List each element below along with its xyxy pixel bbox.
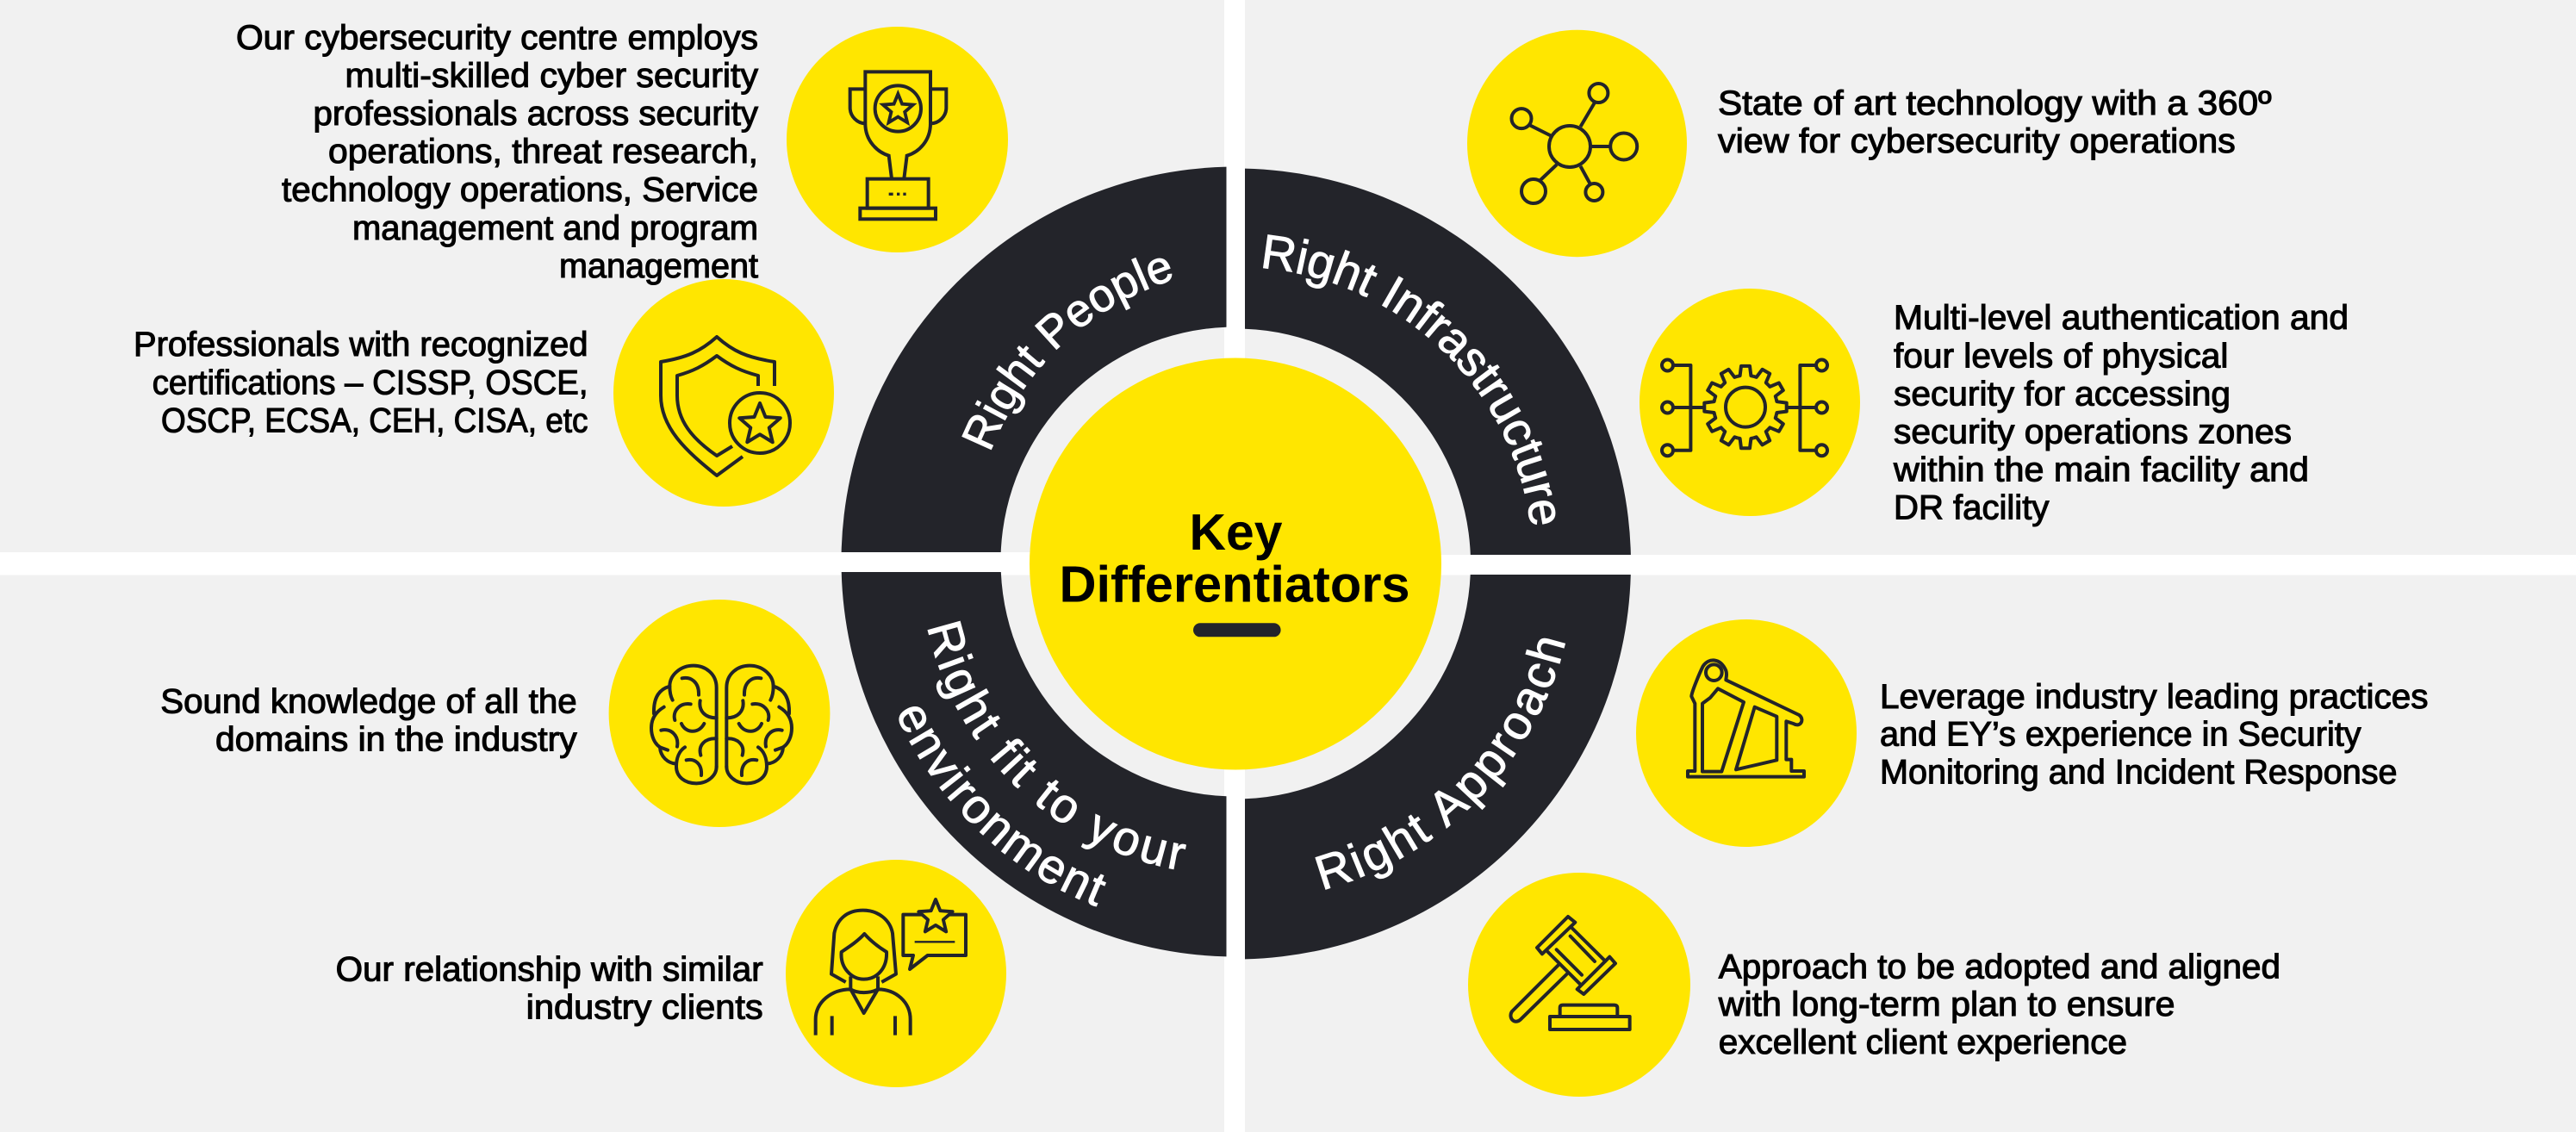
text: state of art technology: State of art technology with a 360º (1718, 84, 2272, 122)
item: state of art technology (1467, 30, 2272, 257)
icon: woman with speech bubble (786, 860, 1006, 1087)
text: state of art technology (1718, 84, 2272, 160)
text: leading practices: Leverage industry leading practices (1880, 678, 2428, 716)
text: client relationship: industry clients (526, 989, 763, 1027)
item: certifications (134, 279, 834, 507)
segment: Right People (841, 167, 1227, 552)
text: multi-skilled professionals: technology operations, Service (282, 171, 758, 208)
item: long-term approach (1468, 873, 2280, 1097)
item: domain knowledge (160, 600, 830, 827)
text: certifications: Professionals with recognized (134, 326, 588, 364)
text: multi-level authentication: within the main facility and (1893, 451, 2309, 489)
segment: Right Approach (1245, 575, 1631, 960)
segment: Right People: Right People (961, 257, 1172, 450)
text: domain knowledge: Sound knowledge of all the (160, 683, 577, 721)
text: multi-level authentication: Multi-level authentication and (1894, 299, 2349, 337)
centre circle: Key Differentiators (1030, 358, 1441, 770)
icon: network nodes (1467, 30, 1687, 257)
text: long-term approach (1718, 948, 2280, 1061)
icon: oil pump (1636, 619, 1857, 847)
text: long-term approach: Approach to be adopted and aligned (1719, 948, 2280, 986)
icon: gavel (1468, 873, 1690, 1097)
segment: Right Infrastructure (1245, 169, 1631, 555)
item: client relationship (336, 860, 1006, 1087)
centre circle: Key Differentiators: Differentiators (1060, 555, 1409, 613)
text: multi-skilled professionals: multi-skilled cyber security (345, 57, 758, 95)
text: multi-level authentication (1893, 299, 2349, 527)
text: multi-skilled professionals: professionals across security (314, 95, 758, 133)
text: long-term approach: excellent client experience (1719, 1023, 2127, 1061)
text: multi-skilled professionals (236, 19, 758, 285)
text: multi-level authentication: security for accessing (1894, 376, 2231, 414)
text: multi-level authentication: four levels of physical (1894, 337, 2228, 375)
segment: Right fit to your environment (841, 572, 1227, 956)
icon: brain (609, 600, 830, 827)
segment: Right fit to your environment: Right fit to your (927, 620, 1186, 870)
text: certifications: certifications – CISSP, OSCE, (152, 364, 588, 401)
text: domain knowledge (160, 683, 577, 758)
ring diagram (841, 167, 1631, 960)
icon: trophy (787, 27, 1008, 252)
text: multi-level authentication: DR facility (1894, 489, 2050, 527)
text: long-term approach: with long-term plan to ensure (1718, 986, 2175, 1023)
text: leading practices: and EY’s experience in Security (1880, 716, 2361, 754)
text: leading practices (1880, 678, 2428, 791)
text: domain knowledge: domains in the industry (215, 720, 577, 758)
text: client relationship (336, 951, 763, 1027)
item: multi-skilled professionals (236, 19, 1008, 285)
text: multi-skilled professionals: management (559, 247, 758, 285)
text: certifications: OSCP, ECSA, CEH, CISA, etc (161, 402, 588, 440)
text: multi-skilled professionals: Our cybersecurity centre employs (236, 19, 758, 57)
centre circle: Key Differentiators: Key (1189, 503, 1282, 561)
text: state of art technology: view for cybersecurity operations (1718, 122, 2236, 160)
text: client relationship: Our relationship with similar (336, 951, 763, 989)
item: multi-level authentication (1640, 289, 2349, 527)
icon: shield with star (613, 279, 834, 507)
text: certifications (134, 326, 588, 440)
segment: Right fit to your environment: environment (899, 706, 1106, 906)
text: multi-level authentication: security operations zones (1894, 413, 2292, 451)
text: leading practices: Monitoring and Incident Response (1880, 753, 2397, 791)
text: multi-skilled professionals: management and program (352, 209, 758, 247)
item: leading practices (1636, 619, 2428, 847)
text: multi-skilled professionals: operations, threat research, (328, 133, 758, 171)
icon: gear with circuit (1640, 289, 1860, 516)
segment: Right Infrastructure: Right Infrastructure (1263, 234, 1556, 526)
segment: Right Approach: Right Approach (1315, 638, 1566, 890)
